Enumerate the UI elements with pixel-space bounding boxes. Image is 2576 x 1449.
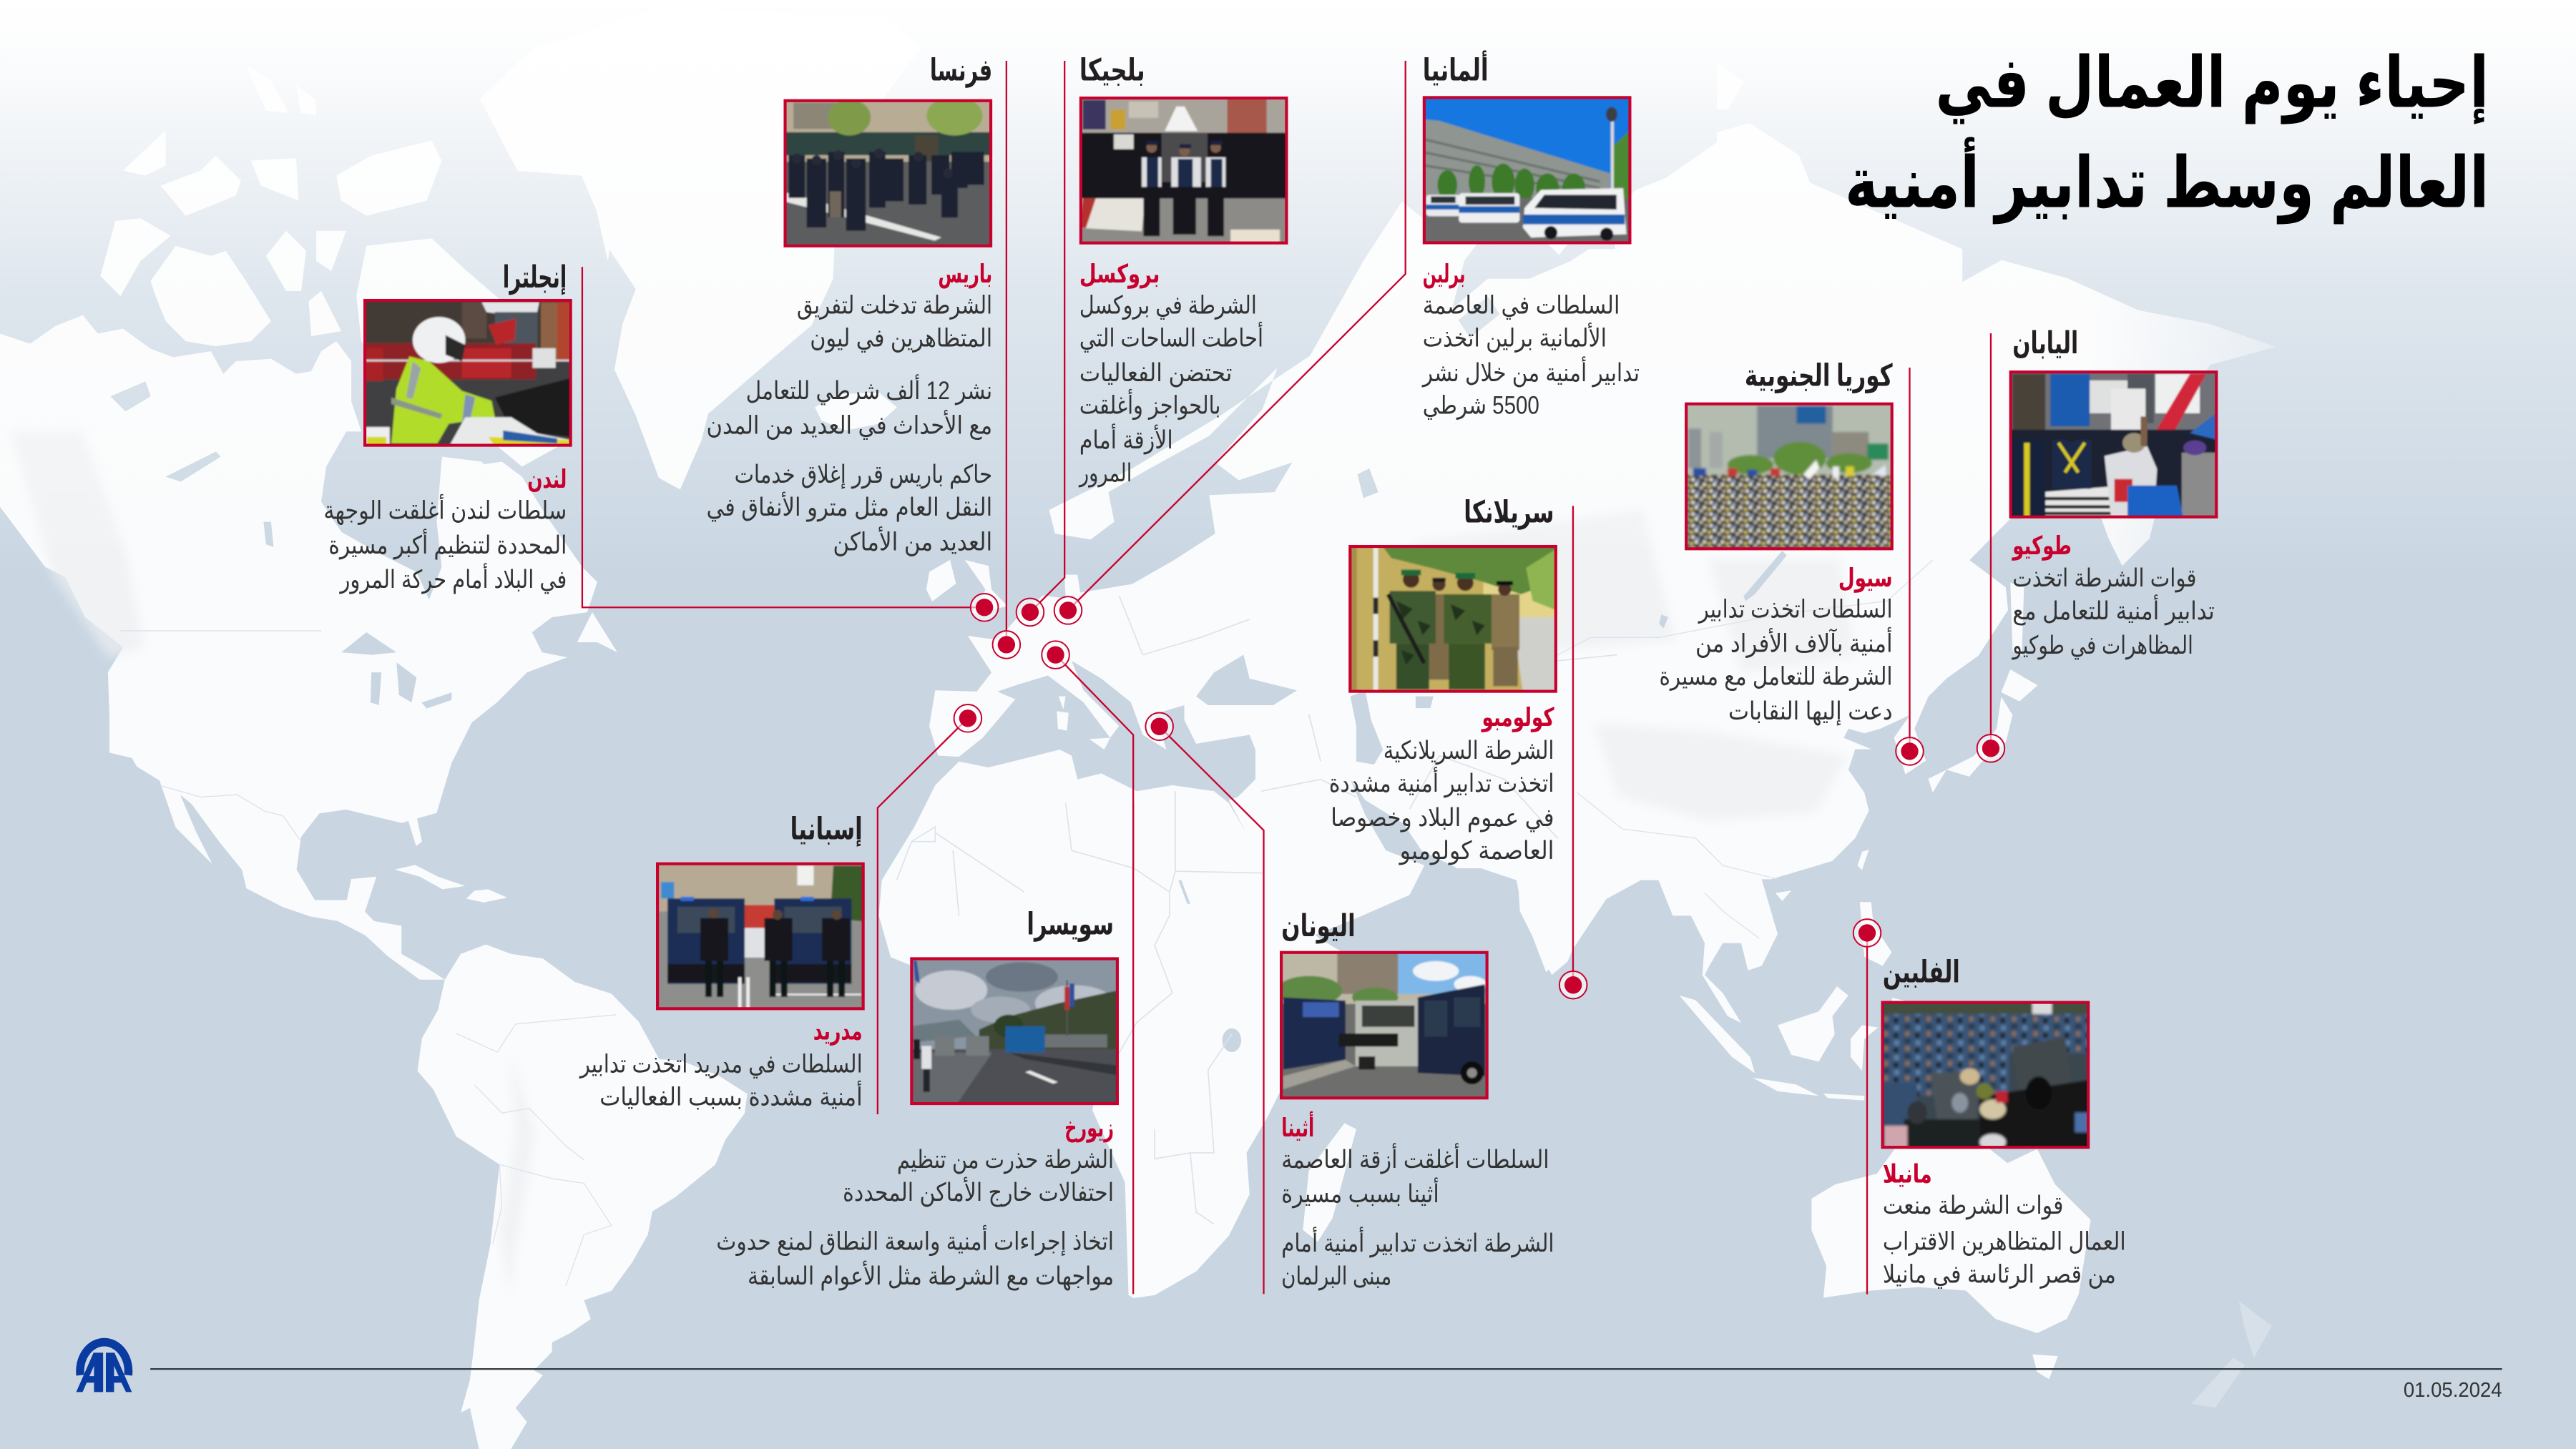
heading: Japan: اليابان — [2012, 327, 2078, 360]
text block: Paris: مع الأحداث في العديد من المدن — [707, 409, 992, 440]
city: Brussels: بروكسل — [1079, 260, 1160, 289]
text block: Seoul: أمنية بآلاف الأفراد من — [1695, 627, 1893, 659]
land: Iceland — [815, 393, 897, 431]
icon: Anadolu Agency logo — [77, 1342, 132, 1392]
text block: Athens — [1281, 1143, 1554, 1291]
text block: Brussels: بالحواجز وأغلقت — [1079, 389, 1220, 421]
panel: France — [707, 54, 992, 556]
city: Colombo: كولومبو — [1481, 703, 1554, 732]
city: London: لندن — [527, 465, 567, 493]
city: Madrid: مدريد — [813, 1017, 863, 1046]
land: North America north — [0, 65, 617, 823]
text block: Zurich — [716, 1146, 1114, 1291]
heading: Belgium: بلجيكا — [1079, 54, 1145, 88]
land: northern and far-eastern Russia — [1717, 62, 2276, 639]
photo: Tokyo demonstration — [2009, 370, 2218, 519]
text block: Colombo — [1329, 737, 1554, 865]
text block: Berlin — [1421, 292, 1640, 421]
eastern map edge fade — [2087, 279, 2333, 608]
text block: Athens: الشرطة اتخذت تدابير أمنية أمام — [1281, 1227, 1554, 1258]
photo: Paris police line — [783, 96, 992, 247]
text block: Tokyo — [2012, 564, 2215, 660]
text block: Manila — [1883, 1192, 2126, 1290]
photo: Athens police buses — [1276, 951, 1489, 1099]
photo: Zurich rainy road with police trucks — [910, 957, 1119, 1105]
photo: Brussels police — [1079, 97, 1288, 245]
leader line and marker: France — [993, 61, 1020, 659]
text block: Brussels: المرور — [1078, 459, 1132, 488]
text block: Berlin: الألمانية برلين اتخذت — [1423, 323, 1607, 353]
city: Zurich: زيورخ — [1064, 1114, 1114, 1143]
text block: Madrid: أمنية مشددة بسبب الفعاليات — [599, 1081, 863, 1111]
text block: Madrid — [579, 1051, 863, 1111]
text block: Zurich: الشرطة حذرت من تنظيم — [897, 1146, 1114, 1174]
land: Greenland — [480, 8, 920, 489]
text block: Seoul: الشرطة للتعامل مع مسيرة — [1660, 663, 1893, 692]
text block: Tokyo: المظاهرات في طوكيو — [2012, 632, 2193, 660]
title — [1845, 43, 2489, 225]
text block: Seoul: دعت إليها النقابات — [1728, 697, 1893, 726]
panel: England — [323, 261, 572, 594]
panel: Germany — [1421, 51, 1640, 421]
leader line and marker: Belgium — [1017, 61, 1064, 626]
footer rule — [150, 1368, 2502, 1370]
leader line and marker: Philippines — [1853, 919, 1881, 1295]
text block: Seoul: السلطات اتخذت تدابير — [1698, 595, 1893, 624]
leader line and marker: Greece — [1145, 712, 1264, 1294]
text block: Tokyo: قوات الشرطة اتخذت — [2012, 564, 2196, 593]
leader line and marker: South Korea — [1896, 368, 1924, 765]
city: Seoul: سيول — [1838, 564, 1893, 593]
text block: Berlin: 5500 شرطي — [1423, 392, 1539, 421]
heading: Greece: اليونان — [1281, 910, 1356, 944]
text block: Paris: الشرطة تدخلت لتفريق — [797, 292, 992, 320]
country borders — [120, 560, 1933, 1286]
text block: Brussels: تحتضن الفعاليات — [1079, 359, 1232, 388]
land: East and South-East Asia — [1431, 501, 2038, 1101]
photo: Madrid police vans — [656, 863, 865, 1010]
photo: Colombo soldiers — [1348, 545, 1557, 693]
city: Tokyo: طوكيو — [2012, 531, 2072, 561]
leader line and marker: England — [582, 267, 998, 622]
land: North and Central America south — [109, 668, 748, 1449]
heading: Switzerland: سويسرا — [1027, 908, 1114, 943]
panel: Philippines — [1881, 956, 2126, 1290]
photo: Seoul rally crowd — [1685, 403, 1894, 550]
photo: Berlin police vans — [1423, 97, 1631, 244]
panel: Sri Lanka — [1329, 496, 1557, 865]
photo: Manila police and protesters — [1881, 1001, 2090, 1150]
text block: London: في البلاد أمام حركة المرور — [339, 563, 567, 594]
text block: Zurich: احتفالات خارج الأماكن المحددة — [843, 1177, 1114, 1207]
leader line and marker: Sri Lanka — [1559, 506, 1587, 999]
panel: Japan — [2009, 327, 2218, 660]
city: Manila: مانيلا — [1883, 1160, 1932, 1189]
heading: Philippines: الفلبين — [1883, 956, 1960, 990]
text block: Brussels: الأزقة أمام — [1079, 423, 1173, 455]
top white fade — [0, 0, 2576, 575]
text block: Paris: النقل العام مثل مترو الأنفاق في — [707, 491, 992, 522]
land: South America — [418, 945, 748, 1449]
text block: London: المحددة لتنظيم أكبر مسيرة — [328, 529, 567, 560]
panel: Belgium — [1078, 54, 1288, 488]
text block: London — [323, 494, 567, 594]
text block: Berlin: السلطات في العاصمة — [1423, 292, 1620, 320]
panel: Switzerland — [716, 908, 1119, 1291]
text block: Paris: العديد من الأماكن — [833, 526, 992, 556]
text block: Brussels: أحاطت الساحات التي — [1079, 322, 1263, 353]
city: Paris: باريس — [938, 260, 992, 289]
text block: Athens: أثينا بسبب مسيرة — [1281, 1177, 1439, 1209]
text block: Paris: نشر 12 ألف شرطي للتعامل — [746, 374, 992, 406]
text block: Colombo: في عموم البلاد وخصوصا — [1331, 804, 1554, 832]
city: Athens: أثينا — [1281, 1111, 1314, 1142]
panel: Spain — [579, 813, 865, 1111]
text block: London: سلطات لندن أغلقت الوجهة — [323, 494, 567, 526]
leader line and marker: Germany — [1054, 61, 1406, 624]
leader line and marker: Japan — [1977, 333, 2004, 762]
land: Europe, Middle East, India west and Africa — [879, 501, 1717, 1298]
text block: Paris — [707, 292, 992, 556]
heading: Sri Lanka: سريلانكا — [1464, 496, 1554, 530]
text block: Paris: المتظاهرين في ليون — [810, 325, 992, 353]
text block: Seoul — [1660, 595, 1893, 726]
text block: Manila: من قصر الرئاسة في مانيلا — [1883, 1261, 2116, 1290]
heading: South Korea: كوريا الجنوبية — [1745, 360, 1893, 394]
terrain shading — [10, 431, 1856, 1297]
city: Berlin: برلين — [1423, 260, 1466, 289]
text block: Brussels — [1078, 292, 1263, 488]
text block: Paris: حاكم باريس قرر إغلاق خدمات — [735, 461, 992, 489]
photo: London police motorcyclist — [363, 299, 572, 447]
text block: Brussels: الشرطة في بروكسل — [1079, 292, 1257, 320]
text block: Tokyo: تدابير أمنية للتعامل مع — [2012, 594, 2215, 626]
text block: Manila: العمال المتظاهرين الاقتراب — [1883, 1228, 2126, 1257]
leader line and marker: Switzerland — [1042, 641, 1133, 1294]
panel: South Korea — [1660, 360, 1894, 726]
heading: France: فرنسا — [930, 54, 992, 89]
text block: Colombo: اتخذت تدابير أمنية مشددة — [1329, 767, 1554, 798]
leader line and marker: Spain — [878, 704, 981, 1114]
seas and lakes — [1178, 655, 1434, 1052]
panel: Greece — [1276, 910, 1554, 1291]
text block: Zurich: اتخاذ إجراءات أمنية واسعة النطاق لمنع حدوث — [716, 1225, 1114, 1257]
text block: Manila: قوات الشرطة منعت — [1883, 1192, 2063, 1220]
text block: Zurich: مواجهات مع الشرطة مثل الأعوام السابقة — [748, 1260, 1114, 1291]
heading: Germany: ألمانيا — [1423, 51, 1489, 88]
text block: Colombo: الشرطة السريلانكية — [1384, 737, 1554, 765]
text block: Athens: السلطات أغلقت أزقة العاصمة — [1281, 1143, 1549, 1174]
text block: Madrid: السلطات في مدريد اتخذت تدابير — [579, 1051, 863, 1079]
land: Scandinavia and western Russia — [1049, 142, 1962, 652]
heading: England: إنجلترا — [503, 261, 567, 295]
text block: Berlin: تدابير أمنية من خلال نشر — [1421, 356, 1640, 388]
heading: Spain: إسبانيا — [790, 813, 863, 848]
text block: Colombo: العاصمة كولومبو — [1399, 837, 1554, 865]
date: 01.05.2024 — [2404, 1379, 2502, 1402]
land: Australia and New Zealand — [1811, 1149, 2272, 1408]
text block: Athens: مبنى البرلمان — [1281, 1262, 1391, 1291]
